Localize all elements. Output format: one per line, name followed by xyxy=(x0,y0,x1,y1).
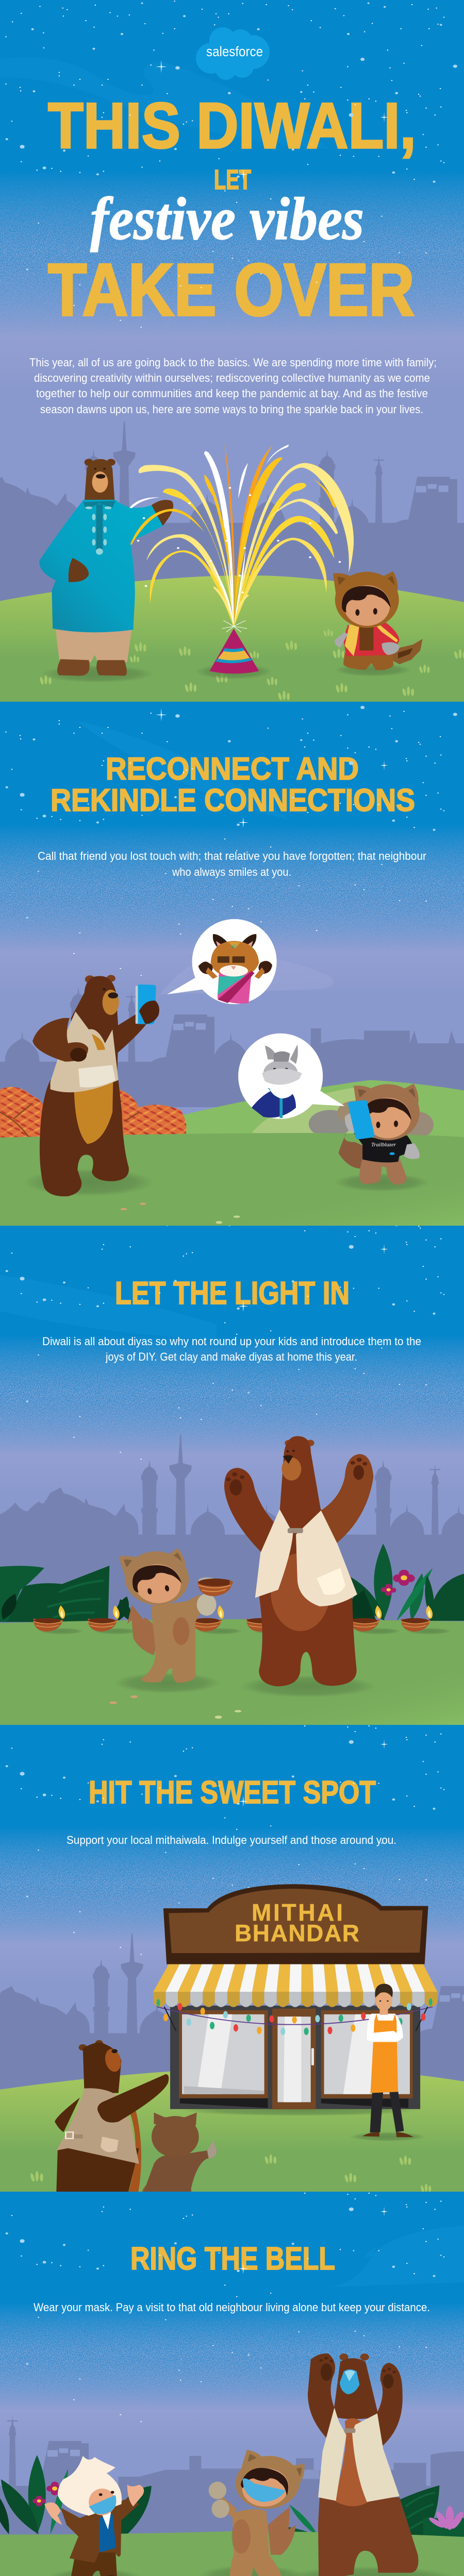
body text: who always smiles at you. xyxy=(172,866,291,878)
body text: Wear your mask. Pay a visit to that old neighbour living alone but keep your distance. xyxy=(34,2301,430,2314)
panel: plant a smile xyxy=(0,2520,464,2576)
foliage left xyxy=(0,2455,152,2537)
heading: LET THE LIGHT IN xyxy=(115,1276,350,1311)
body text: joys of DIY. Get clay and make diyas at home this year. xyxy=(105,1350,357,1363)
autumn bushes xyxy=(0,1087,187,1138)
illustration: mithai shop scene xyxy=(0,1884,464,2196)
foliage right xyxy=(275,2485,464,2538)
sky background xyxy=(0,1226,464,1725)
city skyline xyxy=(0,987,464,1114)
shop sign board xyxy=(163,1884,428,1964)
title: LET xyxy=(214,164,251,195)
city skyline xyxy=(0,1434,464,1626)
shop sign text: MITHAI xyxy=(252,1899,343,1926)
body text: Diwali is all about diyas so why not round up your kids and introduce them to the xyxy=(42,1335,421,1348)
intro text block: season dawns upon us, here are some ways to bring the sparkle back in your lives. xyxy=(40,403,423,416)
character: bear in kurta xyxy=(39,459,173,683)
character: bear with mask xyxy=(284,2353,456,2576)
rocks xyxy=(309,1101,434,1138)
character: astro from behind xyxy=(142,2112,217,2196)
character: astro with phone and Trailblazer hoodie xyxy=(335,1083,429,1192)
illustration: bear video-calling with astro xyxy=(0,919,464,1226)
foliage right xyxy=(334,1544,464,1625)
hill xyxy=(0,575,464,702)
heading: RING THE BELL xyxy=(130,2241,335,2277)
title: TAKE OVER xyxy=(48,248,415,331)
pebbles xyxy=(109,1696,241,1719)
grass tufts xyxy=(30,2155,431,2193)
title: THIS DIWALI, xyxy=(48,90,416,162)
character: astro with mask xyxy=(198,2448,310,2576)
icon: salesforce logo: salesforce xyxy=(206,44,263,59)
intro text block: discovering creativity within ourselves; rediscovering collective humanity as we come xyxy=(34,371,430,384)
title: festive vibes xyxy=(90,185,364,252)
intro text block xyxy=(29,356,437,416)
intro text block: together to help our communities and keep the pandemic at bay. And as the festive xyxy=(36,387,428,400)
heading: HIT THE SWEET SPOT xyxy=(89,1775,376,1810)
shop sign text: BHANDAR xyxy=(235,1920,359,1946)
illustration: neighbours in masks xyxy=(0,2353,464,2576)
firework cone xyxy=(200,629,268,679)
heading: RECONNECT AND xyxy=(106,751,359,786)
heading: REKINDLE CONNECTIONS xyxy=(51,783,415,818)
hill xyxy=(0,2071,464,2194)
character: astro in red jacket xyxy=(333,571,423,676)
title xyxy=(47,102,415,317)
grass tufts xyxy=(39,629,464,701)
body text xyxy=(38,850,426,878)
character: bear with raised arms xyxy=(224,1436,376,1698)
panel: let the light in xyxy=(0,1133,464,1725)
panel: hit the sweet spot xyxy=(0,1628,464,2196)
character: bear holding phone xyxy=(24,975,159,1196)
heading xyxy=(52,757,415,812)
ground xyxy=(0,2531,464,2576)
icon: salesforce logo xyxy=(196,27,270,80)
sky background xyxy=(0,180,464,523)
intro text block: This year, all of us are going back to the basics. We are spending more time with family; xyxy=(29,356,437,369)
striped awning xyxy=(153,1964,437,2007)
body text xyxy=(42,1335,421,1363)
panel: hero introduction xyxy=(0,0,464,702)
illustration: astro and bear with diyas xyxy=(0,1434,464,1725)
firework fountain xyxy=(129,444,354,632)
sky background xyxy=(0,1725,464,2192)
body text: Support your local mithaiwala. Indulge yourself and those around you. xyxy=(67,1834,396,1846)
foliage left xyxy=(0,1566,135,1622)
string lights xyxy=(157,1998,433,2035)
character: einstein with mask xyxy=(44,2456,144,2576)
shop sign text xyxy=(235,1899,359,1946)
back hills xyxy=(139,1107,217,1115)
row of diyas xyxy=(34,1605,451,1634)
shop building xyxy=(170,2006,420,2116)
city skyline xyxy=(0,1933,464,2097)
panel: ring the bell xyxy=(0,2095,464,2576)
body text: Call that friend you lost touch with; that relative you have forgotten; that neighbour xyxy=(38,850,426,862)
sky background xyxy=(0,832,464,1062)
hoodie label: Trailblazer xyxy=(371,1142,396,1148)
speech bubble: burro xyxy=(238,1033,345,1119)
sky background xyxy=(0,2192,464,2576)
character: shopkeeper xyxy=(349,1984,426,2141)
panel: reconnect and rekindle connections xyxy=(0,649,464,1226)
speech bubble: lynx xyxy=(167,919,277,1004)
city skyline xyxy=(0,421,464,615)
character: astro holding diya xyxy=(114,1548,233,1693)
ground xyxy=(0,1133,464,1226)
city skyline xyxy=(0,2417,464,2555)
illustration: bear, firework and astro on hill xyxy=(0,421,464,702)
pebbles xyxy=(121,1202,240,1224)
character: bear pointing, from behind xyxy=(55,2040,169,2196)
ground xyxy=(0,1619,464,1725)
